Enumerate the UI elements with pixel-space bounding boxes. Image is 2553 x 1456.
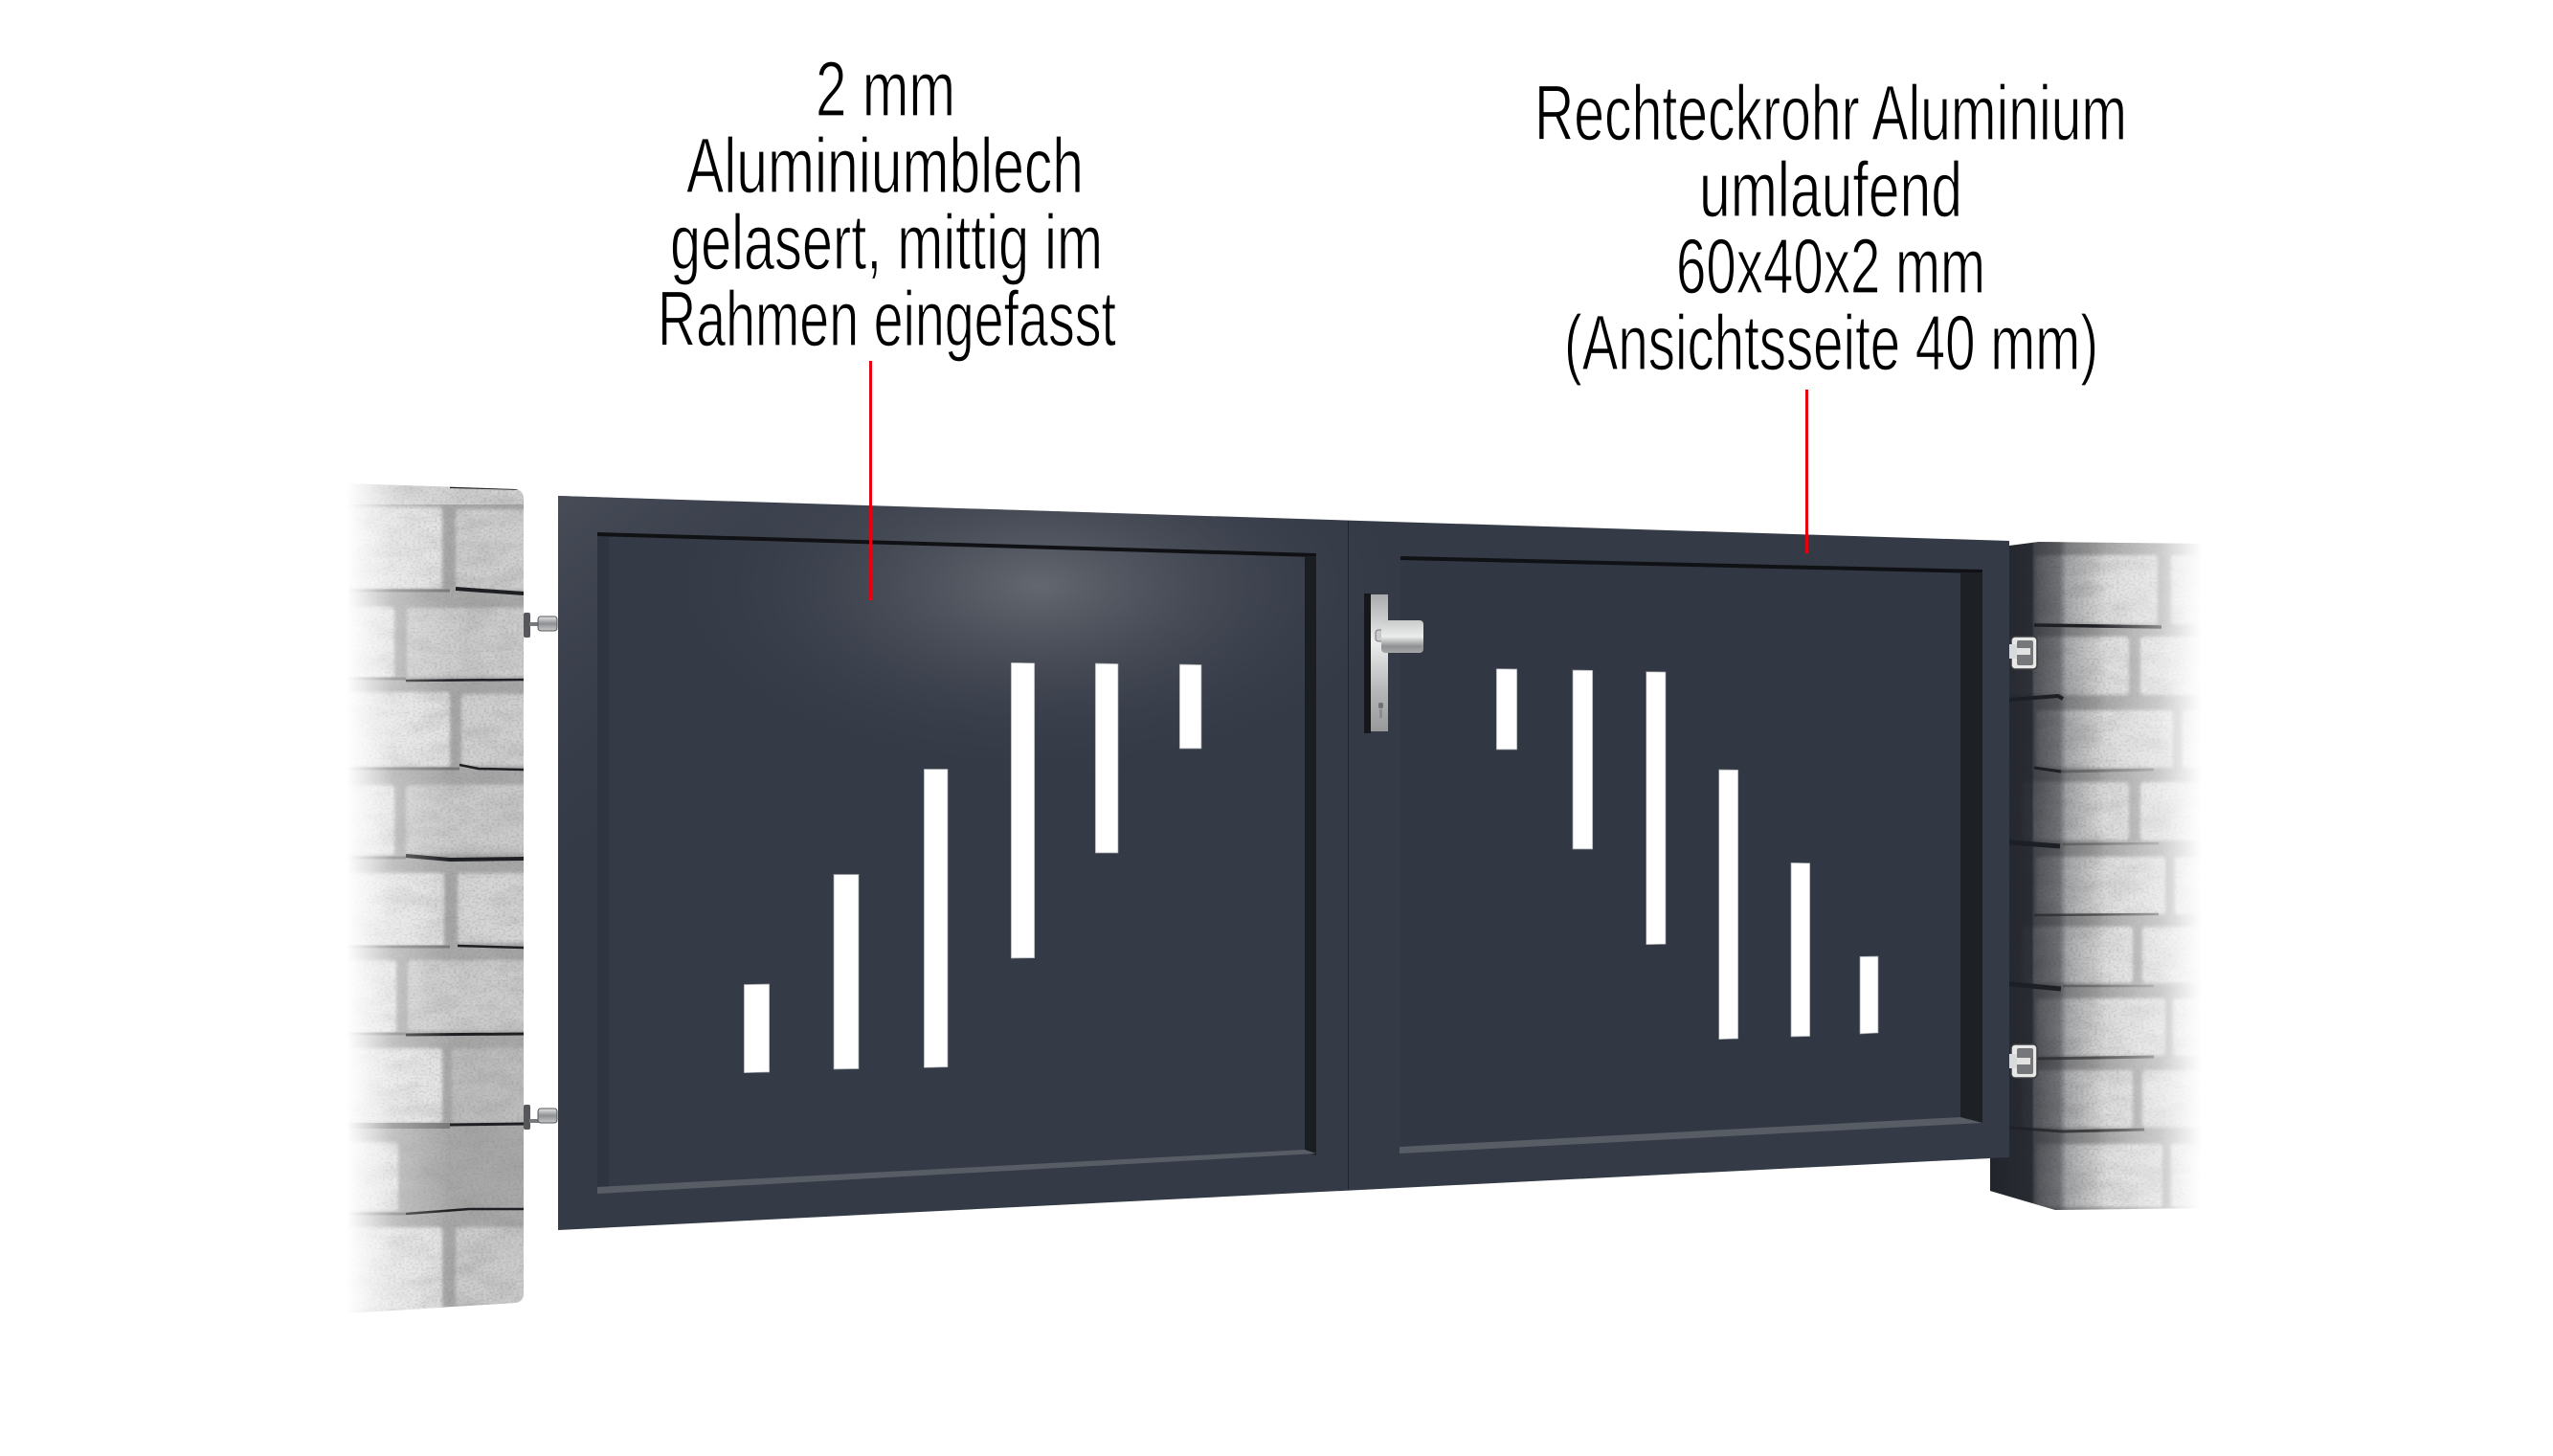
label: 2 mm Aluminiumblech: 2 mm (816, 46, 955, 133)
label: 2 mm Aluminiumblech (658, 46, 1116, 363)
label: 2 mm Aluminiumblech: Rahmen eingefasst (658, 276, 1116, 363)
lower left hinge (524, 1105, 557, 1130)
right leaf laser-cut slots (1496, 669, 1878, 1040)
left leaf inner left shade (597, 534, 609, 1192)
label: Rechteckrohr Aluminium: Rechteckrohr Aluminium (1534, 70, 2127, 157)
left leaf infill panel (609, 535, 1306, 1192)
meeting stile seam (1348, 521, 1350, 1190)
top-left frame sheen (558, 496, 957, 957)
left brick pillar (340, 479, 528, 1316)
label: Rechteckrohr Aluminium: umlaufend (1699, 146, 1962, 234)
left leaf bottom bevel (597, 1150, 1316, 1194)
door handle (1364, 594, 1423, 733)
right leaf infill panel (1400, 558, 1960, 1147)
label: Rechteckrohr Aluminium: 60x40x2 mm (1676, 223, 1985, 310)
right brick pillar (1990, 542, 2196, 1210)
gate frame (558, 496, 2009, 1230)
right leaf right edge shadow (1960, 572, 1982, 1123)
upper left hinge (524, 613, 557, 638)
reflected light (802, 504, 1275, 705)
lower right hinge (2009, 1044, 2037, 1078)
label: 2 mm Aluminiumblech: gelasert, mittig im (670, 199, 1103, 286)
leader line: Aluminiumblech (869, 361, 872, 600)
leader line: Rechteckrohr (1805, 390, 1808, 553)
label: Rechteckrohr Aluminium (1534, 70, 2127, 387)
right leaf top edge shadow (1400, 556, 1982, 573)
right leaf bottom bevel (1400, 1117, 1982, 1154)
label: 2 mm Aluminiumblech: Aluminiumblech (686, 123, 1084, 210)
gate (558, 496, 2009, 1230)
left leaf right edge shadow (1305, 556, 1316, 1155)
label: Rechteckrohr Aluminium: (Ansichtsseite 40 mm) (1564, 300, 2098, 387)
upper right hinge (2009, 637, 2037, 669)
left leaf laser-cut slots (744, 662, 1201, 1073)
left leaf top edge shadow (597, 532, 1316, 557)
